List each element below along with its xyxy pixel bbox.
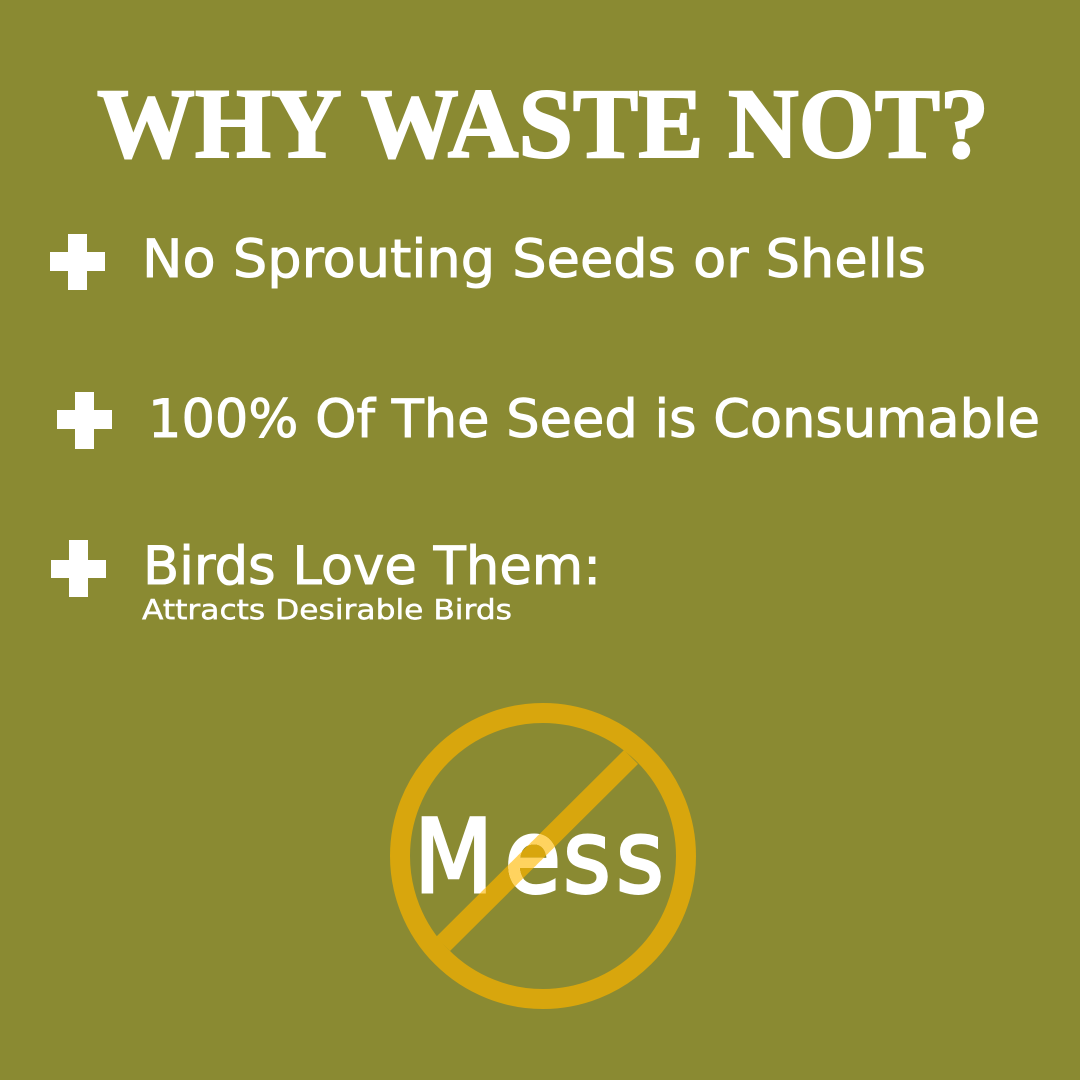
title: WHY WASTE NOT? [97, 68, 989, 179]
icon: plus [51, 540, 106, 597]
list item: 100% of the seed is consumable [57, 389, 1040, 450]
infographic canvas [50, 90, 1038, 1009]
prohibition slash [436, 750, 638, 951]
prohibition ring [400, 713, 686, 999]
no mess symbol [400, 713, 686, 999]
icon: plus [50, 234, 105, 290]
text: attracts desirable birds: Attracts Desirable Birds [142, 593, 512, 626]
word: mess: Mess [414, 797, 664, 916]
text: 100% of the seed is consumable: 100% Of The Seed is Consumable [148, 389, 1040, 450]
list item: birds love them [51, 536, 601, 626]
icon: plus [57, 392, 112, 449]
text: birds love them: Birds Love Them: [143, 536, 601, 597]
text: no sprouting seeds or shells: No Sprouting Seeds or Shells [142, 229, 926, 290]
list item: no sprouting seeds or shells [50, 229, 926, 290]
word overlap tint: Mess [414, 797, 664, 916]
